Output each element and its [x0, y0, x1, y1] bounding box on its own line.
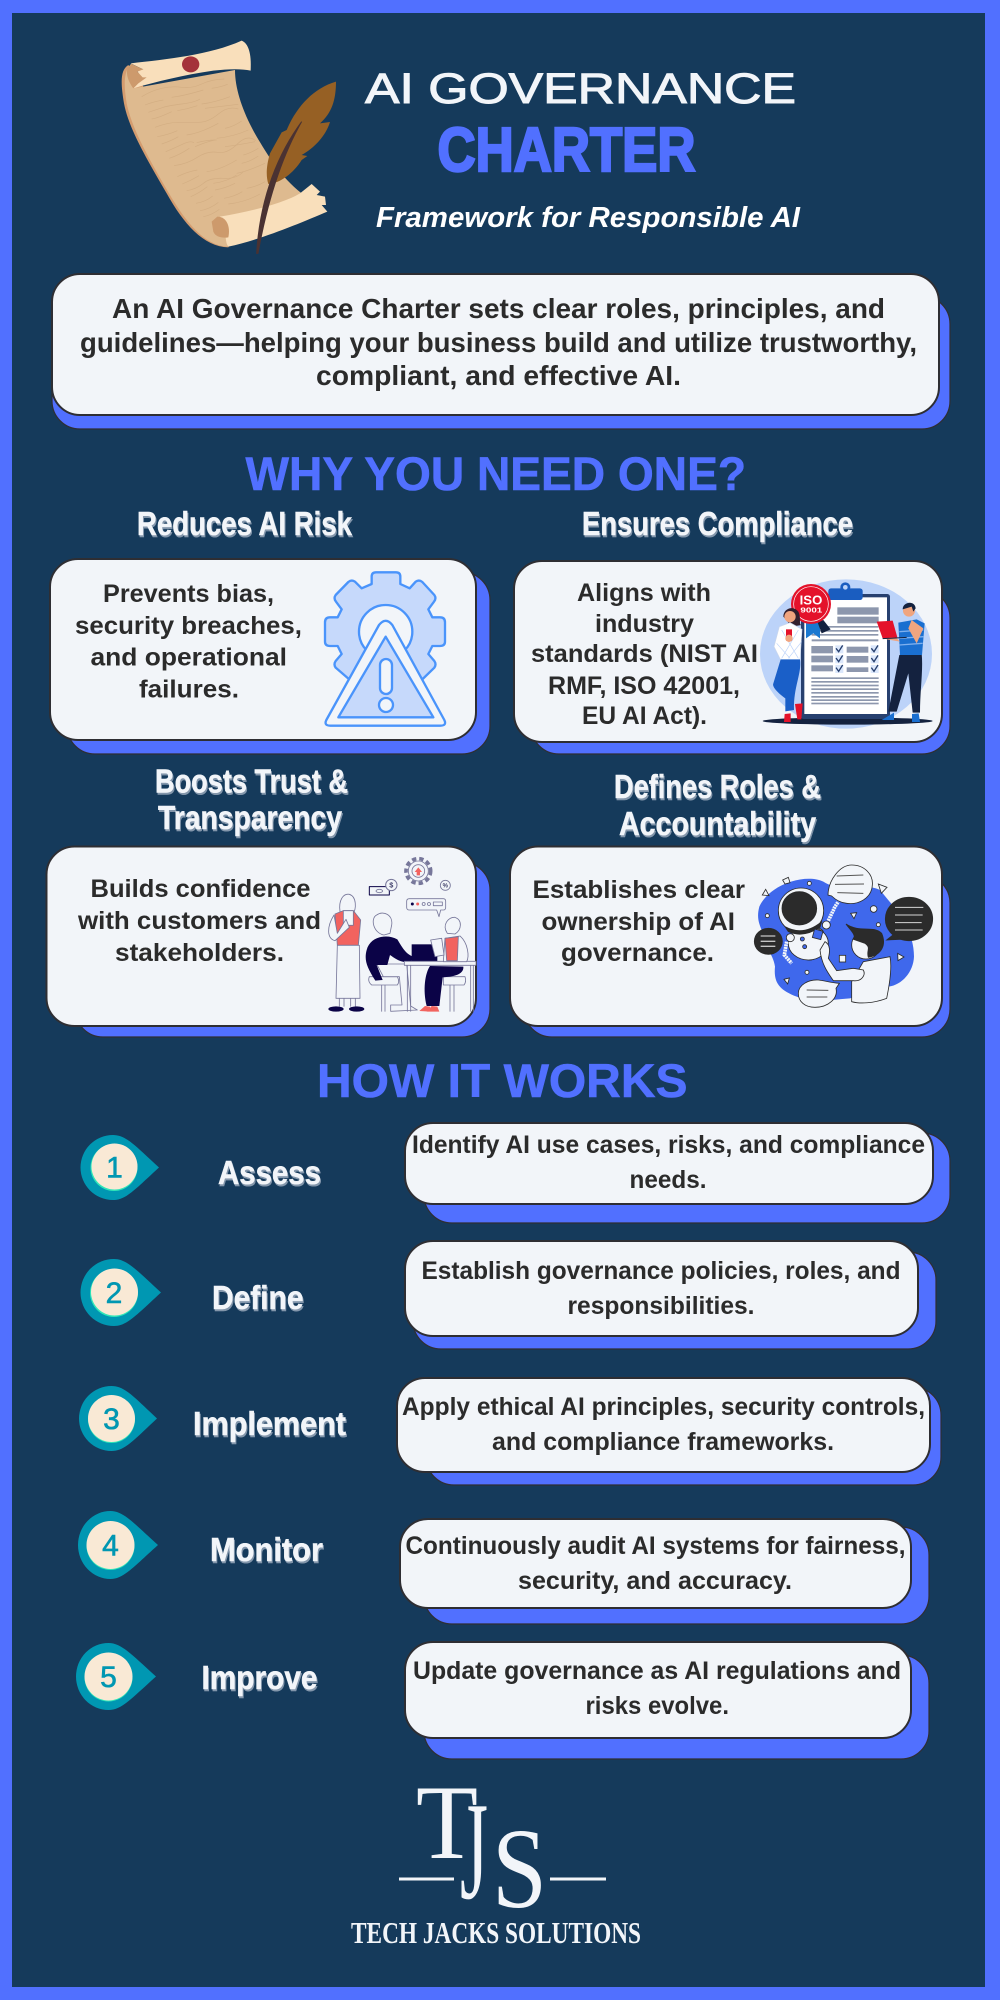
intro text: guidelines—helping your business build and utilize trustworthy, — [80, 327, 917, 358]
panel: ensures compliance — [514, 561, 950, 754]
step card: Update governance as AI regulations and — [413, 1657, 901, 1685]
subheading: defines roles and accountability — [614, 768, 821, 842]
panel text — [75, 580, 302, 704]
seal text — [800, 593, 823, 614]
panel text: ownership of AI — [542, 908, 735, 936]
title line: Charter: CHARTER — [438, 116, 696, 185]
panel text: stakeholders. — [115, 939, 284, 967]
illustration: astronaut and person with speech bubbles — [754, 865, 933, 1007]
step card: responsibilities. — [568, 1292, 754, 1320]
logo monogram: S — [492, 1805, 547, 1932]
heading: why you need one: WHY YOU NEED ONE? — [246, 447, 746, 500]
subheading: boosts trust and transparency: Transparency — [158, 799, 343, 836]
subtitle: Framework for Responsible AI — [376, 202, 801, 234]
panel text: failures. — [139, 676, 239, 704]
step marker 5 — [76, 1643, 156, 1710]
panel: reduces AI risk — [50, 559, 490, 754]
panel text: Aligns with — [577, 579, 711, 607]
intro text: An AI Governance Charter sets clear roles, principles, and — [112, 293, 885, 324]
step label: Monitor — [210, 1531, 323, 1568]
logo: Tech Jacks Solutions — [351, 1764, 641, 1950]
seal text: ISO — [800, 593, 822, 607]
panel: intro definition — [52, 274, 950, 429]
panel text: Establishes clear — [532, 876, 745, 904]
step 5: improve — [76, 1642, 929, 1759]
panel text: governance. — [561, 939, 714, 967]
step card — [405, 1642, 929, 1759]
step card: Continuously audit AI systems for fairness, — [406, 1532, 906, 1560]
step marker 4 — [78, 1511, 158, 1579]
step label: Define — [212, 1279, 304, 1316]
step card — [397, 1378, 941, 1485]
panel text — [531, 579, 758, 730]
step label: Assess — [218, 1154, 321, 1191]
illustration: team meeting at a table — [328, 859, 476, 1012]
icon: parchment scroll with feather quill — [122, 41, 336, 253]
step label: Implement — [193, 1405, 346, 1442]
step card: security, and accuracy. — [518, 1567, 792, 1595]
step card — [405, 1241, 936, 1349]
step marker 1 — [80, 1135, 159, 1200]
subheading: defines roles and accountability: Defines Roles & — [614, 768, 821, 805]
panel text: industry — [595, 610, 694, 638]
step marker 2: 2 — [106, 1277, 122, 1310]
step card — [405, 1123, 950, 1223]
subheading: defines roles and accountability: Accountability — [619, 805, 817, 842]
step marker 3 — [79, 1386, 157, 1451]
illustration: people with ISO 9001 checklist — [760, 579, 933, 729]
illustration: team meeting at a table: % — [443, 884, 449, 890]
panel text: with customers and — [77, 907, 321, 935]
step 3: implement — [79, 1378, 941, 1485]
step marker 1: 1 — [106, 1152, 123, 1184]
step card: needs. — [630, 1166, 706, 1194]
step marker 4: 4 — [102, 1530, 119, 1562]
step 4: monitor — [78, 1511, 929, 1624]
subheading: boosts trust and transparency: Boosts Trust & — [155, 762, 348, 800]
step 2: define — [80, 1241, 936, 1349]
step 1: assess — [80, 1123, 950, 1223]
heading: how it works: HOW IT WORKS — [317, 1054, 688, 1107]
step card: Establish governance policies, roles, and — [422, 1257, 900, 1285]
panel text: security breaches, — [75, 612, 302, 640]
logo wordmark: TECH JACKS SOLUTIONS — [351, 1915, 641, 1950]
panel text: standards (NIST AI — [531, 640, 758, 668]
title: AI Governance Charter — [365, 65, 796, 185]
panel text: RMF, ISO 42001, — [548, 672, 740, 700]
step marker 3: 3 — [103, 1403, 120, 1436]
panel: defines roles and accountability — [510, 846, 950, 1037]
subheading: boosts trust and transparency — [155, 762, 348, 836]
step card: Identify AI use cases, risks, and compliance — [412, 1131, 925, 1159]
step card: Apply ethical AI principles, security controls, — [402, 1393, 925, 1421]
step card — [400, 1519, 929, 1624]
panel text: and operational — [90, 644, 287, 672]
subheading: ensures compliance: Ensures Compliance — [582, 505, 853, 542]
logo monogram: T — [416, 1764, 478, 1881]
intro text — [80, 293, 917, 391]
panel text: EU AI Act). — [582, 702, 707, 730]
step card: risks evolve. — [586, 1692, 729, 1720]
subheading: reduces AI risk: Reduces AI Risk — [137, 505, 353, 542]
title line: AI Governance: AI GOVERNANCE — [365, 65, 796, 113]
panel: boosts trust and transparency — [46, 846, 490, 1037]
step card: and compliance frameworks. — [492, 1428, 834, 1456]
panel text: Builds confidence — [90, 875, 311, 903]
step label: Improve — [202, 1659, 318, 1696]
logo monogram — [399, 1764, 606, 1932]
illustration: team meeting at a table: $ — [389, 881, 393, 890]
icon: gear with warning triangle — [325, 572, 445, 726]
seal text: 9001 — [800, 605, 823, 614]
panel text — [77, 875, 321, 967]
step marker 5: 5 — [100, 1661, 117, 1694]
panel text — [532, 876, 745, 967]
logo monogram: J — [460, 1774, 488, 1929]
step marker 2 — [80, 1259, 161, 1326]
panel text: Prevents bias, — [103, 580, 274, 608]
intro text: compliant, and effective AI. — [316, 360, 681, 391]
